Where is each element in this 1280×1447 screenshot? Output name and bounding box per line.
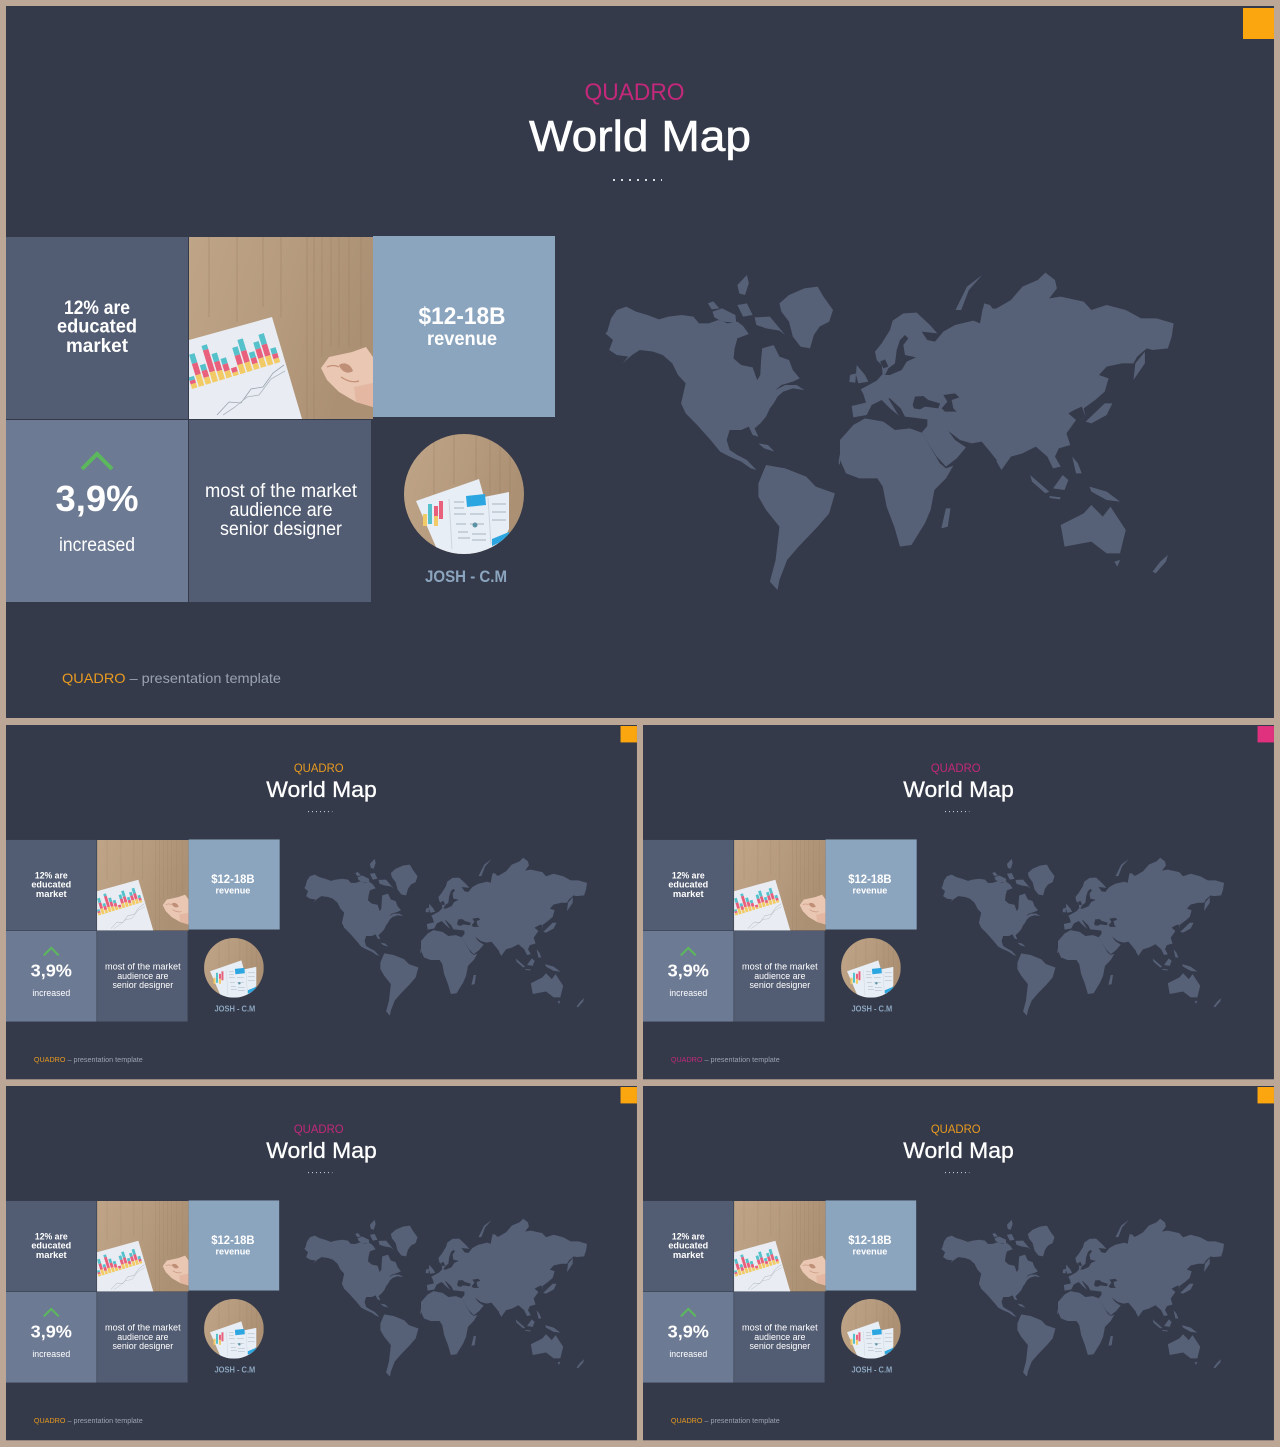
small slide: top right <box>643 725 1274 1079</box>
footer: QUADRO – presentation template <box>671 1418 780 1425</box>
small slide: bottom right <box>643 1086 1274 1440</box>
panel: audience <box>734 931 825 1022</box>
panel: revenue: revenue <box>215 886 250 897</box>
panel: audience <box>97 1292 188 1383</box>
panel: education <box>643 840 734 931</box>
panel: increase: 3,9% <box>668 1321 709 1341</box>
panel: education: 12% are <box>64 298 130 319</box>
panel: increase <box>6 1292 97 1383</box>
panel: education: educated <box>668 879 708 890</box>
main slide <box>6 6 1274 718</box>
panel: audience: audience are <box>754 1332 805 1343</box>
title dots <box>945 1172 969 1174</box>
panel: education <box>6 840 97 931</box>
panel: audience: audience are <box>754 971 805 982</box>
panel: revenue: revenue <box>215 1247 250 1258</box>
corner square <box>621 726 637 742</box>
panel: audience: senior designer <box>749 1341 810 1352</box>
panel: revenue <box>826 1200 916 1291</box>
title: World Map <box>903 1138 1014 1163</box>
panel: education: educated <box>57 316 137 338</box>
panel: increase: increased <box>32 988 70 999</box>
panel: audience: most of the market <box>742 1322 818 1333</box>
corner square <box>621 1087 637 1103</box>
panel: increase: increased <box>59 535 135 556</box>
panel: revenue: revenue <box>852 886 887 897</box>
panel: increase <box>643 931 734 1022</box>
panel: audience: audience are <box>117 971 168 982</box>
profile: photo and name: JOSH - C.M <box>425 568 507 586</box>
profile: photo and name <box>841 938 901 1014</box>
title dots <box>308 811 332 813</box>
panel: education: market <box>673 889 705 900</box>
panel: revenue: $12-18B <box>848 1233 892 1247</box>
panel: revenue <box>189 1200 279 1291</box>
panel: audience: most of the market <box>105 1322 181 1333</box>
panel: education: market <box>673 1250 705 1261</box>
panel: increase: increased <box>669 1349 707 1360</box>
panel: increase <box>643 1292 734 1383</box>
profile: photo and name <box>204 1299 264 1375</box>
panel: education: 12% are <box>672 870 705 881</box>
world map <box>304 1219 587 1377</box>
eyebrow label: QUADRO <box>294 761 344 775</box>
world map <box>941 1219 1224 1377</box>
panel: revenue: $12-18B <box>418 303 506 330</box>
world map <box>941 858 1224 1016</box>
panel: revenue <box>826 839 917 930</box>
profile: photo and name <box>404 434 524 586</box>
panel: audience: audience are <box>230 500 332 521</box>
panel: revenue <box>373 236 555 417</box>
panel: increase: 3,9% <box>31 960 72 980</box>
profile: photo and name: JOSH - C.M <box>214 1366 255 1375</box>
panel: education: 12% are <box>35 1231 68 1242</box>
world map <box>605 273 1174 590</box>
panel: increase <box>6 931 97 1022</box>
panel: revenue: revenue <box>852 1247 887 1258</box>
panel: audience <box>189 420 371 602</box>
profile: photo and name: JOSH - C.M <box>214 1005 255 1014</box>
footer: QUADRO – presentation template <box>671 1057 780 1064</box>
panel: audience: senior designer <box>220 519 343 540</box>
panel: revenue <box>189 839 280 930</box>
profile: photo and name <box>841 1299 901 1375</box>
panel: audience: most of the market <box>205 481 358 502</box>
panel: audience: audience are <box>117 1332 168 1343</box>
panel: increase: 3,9% <box>56 478 138 519</box>
photo: chart on wood <box>93 1201 189 1292</box>
panel: education: 12% are <box>35 870 68 881</box>
corner square <box>1258 726 1274 742</box>
small slide: bottom left <box>6 1086 637 1440</box>
title: World Map <box>266 777 377 802</box>
title: World Map <box>903 777 1014 802</box>
eyebrow label: QUADRO <box>294 1122 344 1136</box>
profile: photo and name: JOSH - C.M <box>851 1366 892 1375</box>
panel: audience: senior designer <box>112 980 173 991</box>
panel: education <box>6 237 188 419</box>
panel: revenue: $12-18B <box>211 1233 255 1247</box>
title: World Map <box>529 112 751 161</box>
corner square <box>1258 1087 1274 1103</box>
panel: audience <box>734 1292 825 1383</box>
panel: education <box>6 1201 97 1292</box>
eyebrow label: QUADRO <box>584 79 684 106</box>
corner square <box>1243 8 1274 39</box>
title dots <box>308 1172 332 1174</box>
panel: revenue: revenue <box>427 329 497 350</box>
photo: chart on wood <box>181 237 373 419</box>
panel: education: educated <box>31 1240 71 1251</box>
panel: education: market <box>66 336 129 357</box>
panel: audience: senior designer <box>112 1341 173 1352</box>
profile: photo and name <box>204 938 264 1014</box>
photo: chart on wood <box>730 840 826 931</box>
panel: audience <box>97 931 188 1022</box>
panel: education: 12% are <box>672 1231 705 1242</box>
footer: QUADRO – presentation template <box>62 670 281 686</box>
panel: education: market <box>36 1250 68 1261</box>
panel: audience: most of the market <box>742 961 818 972</box>
panel: education: educated <box>31 879 71 890</box>
panel: education: educated <box>668 1240 708 1251</box>
panel: increase: increased <box>32 1349 70 1360</box>
panel: increase: 3,9% <box>31 1321 72 1341</box>
title dots <box>613 179 662 181</box>
panel: education <box>643 1201 734 1292</box>
profile: photo and name: JOSH - C.M <box>851 1005 892 1014</box>
footer: QUADRO – presentation template <box>34 1418 143 1425</box>
photo: chart on wood <box>93 840 189 931</box>
photo: chart on wood <box>730 1201 826 1292</box>
panel: increase <box>6 420 188 602</box>
panel: education: market <box>36 889 68 900</box>
footer: QUADRO – presentation template <box>34 1057 143 1064</box>
world map <box>304 858 587 1016</box>
small slide: top left <box>6 725 637 1079</box>
title: World Map <box>266 1138 377 1163</box>
panel: revenue: $12-18B <box>848 872 892 886</box>
panel: increase: 3,9% <box>668 960 709 980</box>
eyebrow label: QUADRO <box>931 761 981 775</box>
panel: audience: most of the market <box>105 961 181 972</box>
panel: increase: increased <box>669 988 707 999</box>
title dots <box>945 811 969 813</box>
panel: revenue: $12-18B <box>211 872 255 886</box>
eyebrow label: QUADRO <box>931 1122 981 1136</box>
panel: audience: senior designer <box>749 980 810 991</box>
